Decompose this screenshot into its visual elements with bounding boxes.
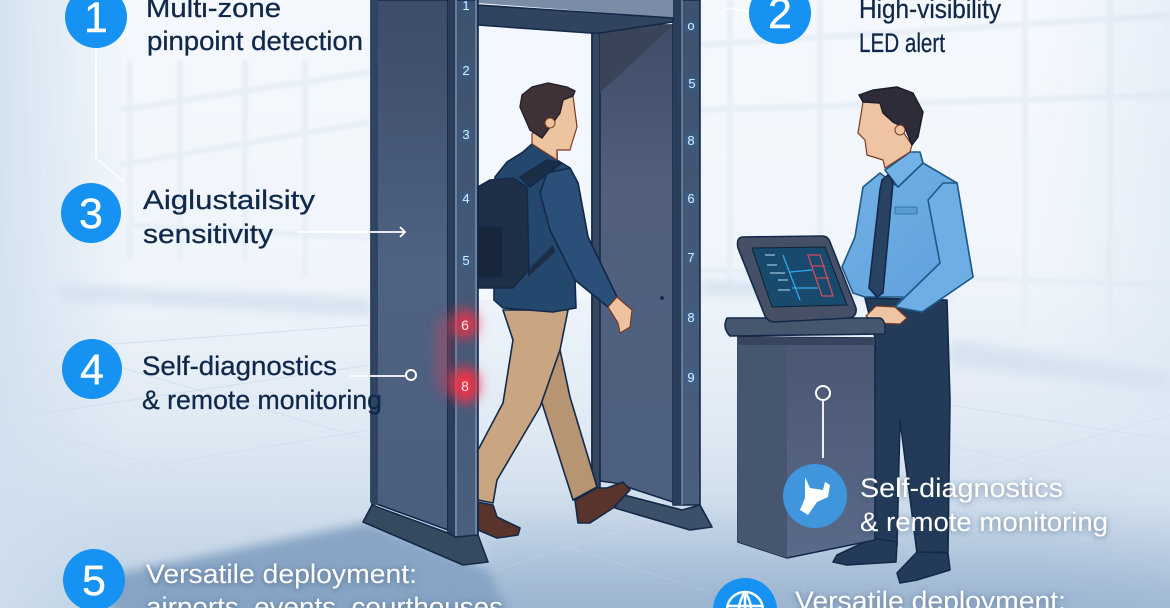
connector lines	[96, 8, 830, 458]
zone numbers left: 3	[462, 127, 470, 142]
trousers	[865, 298, 950, 553]
sleeve	[895, 183, 973, 312]
callout 5: versatile deployment: 5	[82, 557, 106, 605]
shoes	[478, 502, 520, 538]
ear	[895, 125, 905, 135]
neck and face	[532, 96, 577, 160]
zone numbers right	[687, 18, 696, 385]
zone numbers right: 8	[687, 310, 695, 325]
person walking with backpack	[478, 83, 632, 538]
zone numbers right: o	[687, 18, 695, 33]
right base	[615, 494, 712, 530]
backpack	[478, 178, 529, 288]
hand	[608, 297, 632, 333]
right column	[592, 0, 712, 530]
callout 3: sensitivity: sensitivity	[143, 219, 274, 249]
callout 4: self-diagnostics: Self-diagnostics	[142, 351, 337, 381]
overhead beam	[478, 0, 673, 33]
zone numbers left: 5	[462, 253, 470, 268]
hair	[520, 83, 575, 138]
icon: wrench	[800, 477, 830, 515]
callout 5: versatile deployment	[63, 549, 503, 608]
red alert glow	[435, 309, 479, 403]
desktop	[725, 318, 885, 336]
callout 1: multi-zone: pinpoint detection	[147, 26, 363, 56]
front leg	[478, 310, 568, 503]
zone numbers right: 7	[687, 250, 695, 265]
backpack pocket	[478, 227, 502, 277]
left base	[363, 505, 488, 565]
collar	[885, 152, 923, 187]
shoes	[833, 538, 897, 565]
security guard	[833, 87, 973, 583]
hand	[866, 306, 907, 324]
upper strap	[520, 160, 562, 187]
zone numbers right: 6	[687, 191, 695, 206]
callout: globe icon with versatile deployment	[713, 578, 1066, 608]
name badge	[895, 207, 917, 214]
kiosk: tablet and pedestal	[725, 236, 885, 558]
floor shadow under left text	[110, 522, 520, 608]
callout 4: self-diagnostics	[62, 339, 382, 415]
callout 2: LED alert: LED alert	[859, 28, 945, 58]
hair	[859, 87, 923, 145]
shirt	[842, 163, 973, 312]
tablet	[738, 236, 856, 322]
zone numbers left: 8	[461, 378, 469, 394]
door handle dot	[660, 296, 664, 300]
zone numbers right: 9	[687, 370, 695, 385]
zone numbers right: 8	[687, 133, 695, 148]
tie	[869, 175, 893, 297]
callout 3: sensitivity	[61, 183, 316, 249]
callout 4: self-diagnostics: 4	[80, 346, 104, 394]
back leg	[530, 350, 597, 500]
jacket	[494, 144, 617, 312]
zone numbers left	[461, 0, 470, 394]
tablet screen	[752, 247, 847, 307]
callout 4: self-diagnostics: & remote monitoring	[142, 385, 382, 415]
walk-through metal detector gate	[363, 0, 712, 565]
callout: wrench icon with self-diagnostics: & remote monitoring	[860, 507, 1108, 537]
callout: wrench icon with self-diagnostics: Self-diagnostics	[860, 473, 1063, 503]
pedestal	[738, 337, 875, 558]
zone numbers left: 6	[461, 317, 469, 333]
zone numbers left: 4	[462, 191, 470, 206]
lower strap	[528, 245, 555, 277]
callout 3: sensitivity: 3	[79, 190, 103, 238]
floor shadow right	[480, 500, 1170, 608]
callout: wrench icon with self-diagnostics	[783, 464, 1108, 537]
callout 2: LED alert	[749, 0, 1001, 58]
callout 1: multi-zone	[65, 0, 363, 56]
zone numbers left: 2	[462, 63, 470, 78]
ear	[545, 118, 555, 128]
zone numbers right: 5	[688, 76, 696, 91]
callout 5: versatile deployment: Versatile deployment:	[146, 559, 417, 589]
left column	[363, 0, 488, 565]
arm	[540, 168, 617, 307]
callout 3: sensitivity: Aiglustailsity	[143, 185, 316, 215]
neck and face	[858, 102, 912, 168]
icon: globe	[727, 592, 763, 608]
